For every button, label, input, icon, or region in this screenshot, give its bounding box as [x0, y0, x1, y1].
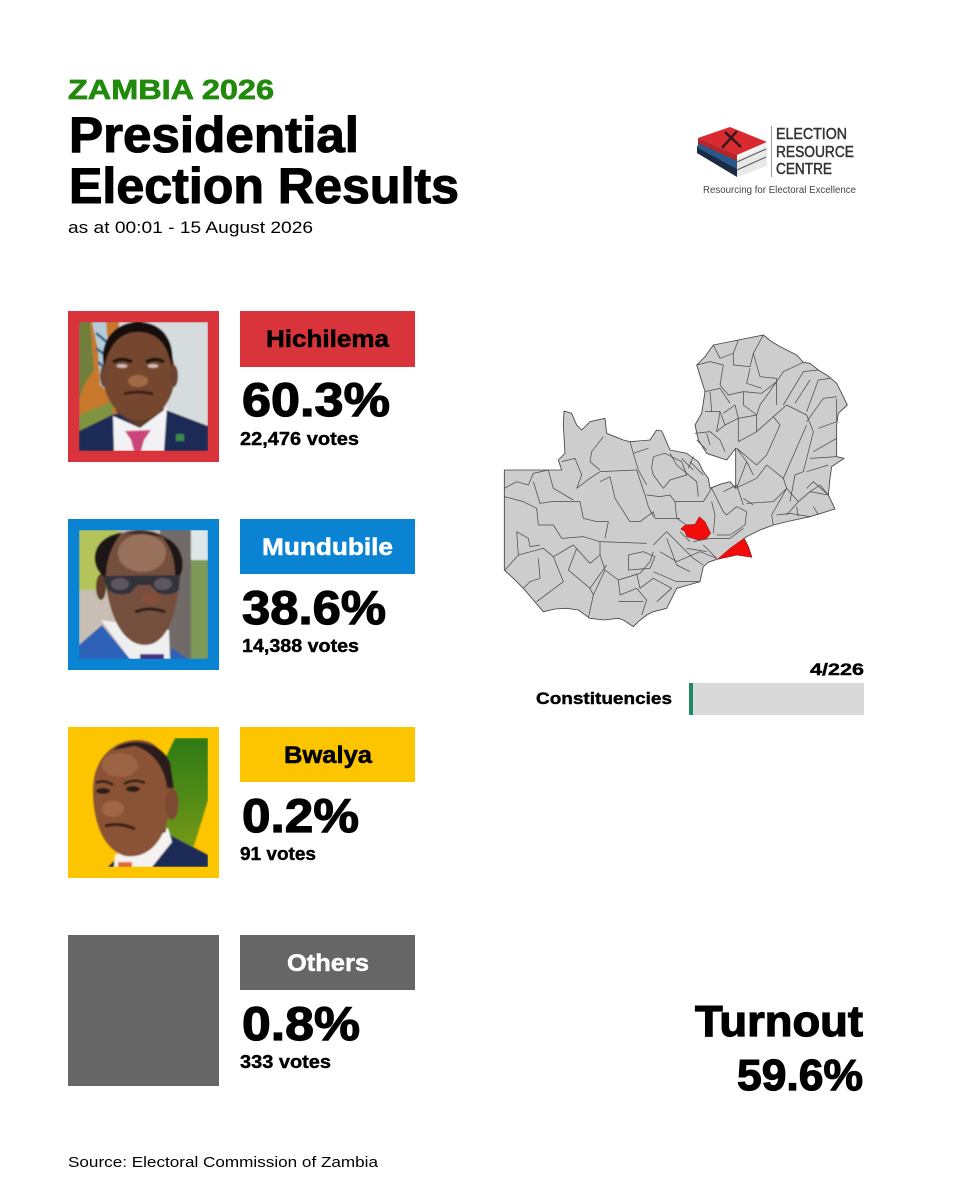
candidate: Bwalya: [68, 727, 415, 878]
map outline: [504, 335, 847, 627]
name label: [240, 727, 415, 782]
logo: Election Resource Centre: RESOURCE: [776, 144, 854, 161]
portrait: Mundubile: [68, 519, 219, 670]
turnout label: Turnout: [695, 997, 863, 1046]
vote share: 60.3%: [242, 373, 390, 426]
logo wordmark: ELECTION: [776, 126, 847, 143]
name label: [240, 311, 415, 367]
icon: stack of books with X: [697, 127, 767, 177]
timestamp: as at 00:01 - 15 August 2026: [68, 218, 313, 237]
candidate: Mundubile: [68, 519, 415, 670]
map: Zambia constituencies: [504, 335, 847, 627]
progress bar track: [689, 683, 864, 715]
candidate: Others: [68, 935, 415, 1086]
portrait placeholder: Others: [68, 935, 219, 1086]
name label: Bwalya: [284, 742, 373, 769]
portrait: Hichilema: [68, 311, 219, 462]
turnout value: 59.6%: [737, 1051, 863, 1100]
progress: constituencies reported: [536, 660, 864, 715]
highlighted constituency: central: [681, 517, 711, 540]
portrait: Bwalya: [68, 727, 219, 878]
kicker: ZAMBIA 2026: ZAMBIA 2026: [68, 74, 274, 105]
vote count: 91 votes: [240, 844, 316, 864]
header: title block: [68, 74, 459, 237]
vote count: 14,388 votes: [242, 636, 359, 656]
name label: Mundubile: [262, 534, 393, 561]
highlighted constituency: eastern border: [717, 538, 752, 559]
vote share: 0.8%: [242, 997, 360, 1050]
constituency boundaries: [504, 335, 837, 618]
turnout: [695, 997, 863, 1100]
count label: 4/226: [810, 660, 864, 679]
progress bar fill: [689, 683, 693, 715]
name label: [240, 519, 415, 574]
heading: Presidential: Presidential: [69, 107, 359, 163]
name label: [240, 935, 415, 990]
heading: Election Results: Election Results: [69, 158, 459, 214]
bar label: Constituencies: [536, 689, 672, 708]
logo: Election Resource Centre: CENTRE: [776, 161, 832, 178]
divider: [770, 126, 772, 177]
vote share: 38.6%: [242, 581, 386, 634]
vote count: 22,476 votes: [240, 429, 359, 449]
vote count: 333 votes: [240, 1052, 331, 1072]
logo: Election Resource Centre: [697, 126, 856, 196]
vote share: 0.2%: [242, 789, 359, 842]
logo tagline: Resourcing for Electoral Excellence: [703, 185, 856, 196]
source note: Source: Electoral Commission of Zambia: [68, 1154, 379, 1171]
name label: Hichilema: [266, 326, 390, 353]
candidate: Hichilema: [68, 311, 415, 462]
name label: Others: [287, 950, 369, 977]
